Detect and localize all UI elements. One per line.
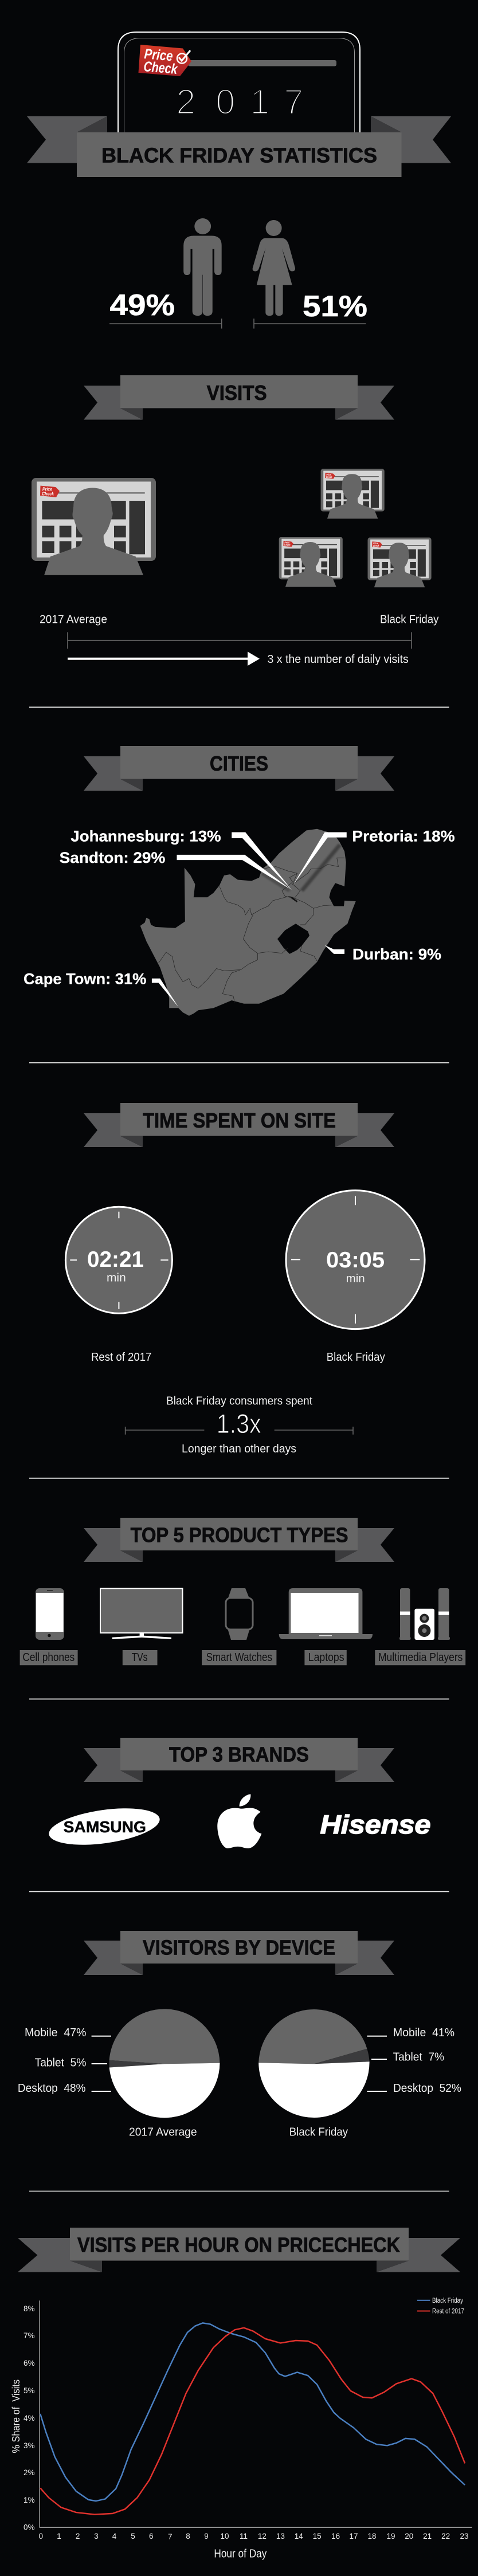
x axis labels [39, 2532, 469, 2541]
product: cell phones [20, 1588, 78, 1665]
callout: Johannesburg 13%: Johannesburg: 13% [70, 828, 221, 845]
legend: mobile 41%: Mobile 41% [393, 2027, 455, 2039]
visits comparison scale: Black Friday [380, 614, 438, 626]
map of South Africa [140, 829, 356, 1016]
product: smart watches: Smart Watches [206, 1651, 272, 1664]
clock: Black Friday: 03:05 [326, 1248, 385, 1273]
x axis labels: 21 [423, 2532, 432, 2540]
y axis labels: 4% [23, 2414, 34, 2422]
x axis labels: 5 [131, 2532, 135, 2540]
callout: Cape Town 31% [23, 970, 178, 1007]
axes [40, 2300, 472, 2527]
x axis title: Hour of Day [214, 2548, 267, 2561]
legend: tablet 7% [371, 2051, 444, 2064]
callout: Pretoria 18%: Pretoria: 18% [352, 828, 455, 845]
series: Rest of 2017 [40, 2328, 465, 2515]
icon: small monitor 2, Black Friday: Check [284, 544, 291, 547]
product: multimedia players: Multimedia Players [378, 1651, 463, 1664]
product: TVs [100, 1588, 182, 1665]
main title ribbon: BLACK FRIDAY STATISTICS [101, 143, 377, 167]
clock: rest of 2017: min [107, 1272, 126, 1285]
x axis labels: 16 [331, 2532, 340, 2540]
callout: Johannesburg 13% [70, 828, 292, 890]
product: laptops [279, 1588, 373, 1665]
pie chart: 2017 average [18, 2009, 220, 2139]
heading: time spent on site [84, 1103, 394, 1147]
x axis labels: 9 [204, 2532, 209, 2540]
x axis labels: 7 [168, 2532, 173, 2541]
y axis labels: 2% [23, 2468, 34, 2477]
icon: large monitor with visitor, 2017 average: Check [42, 490, 54, 496]
x axis labels: 20 [405, 2532, 413, 2540]
logo: Hisense: Hisense [320, 1810, 431, 1839]
legend: Rest of 2017 [432, 2308, 464, 2315]
tablet frame with logo and year [118, 32, 360, 132]
x axis labels: 22 [441, 2532, 450, 2540]
callout: Sandton 29%: Sandton: 29% [60, 849, 165, 866]
visits comparison scale: 2017 Average [40, 614, 107, 626]
heading: visits: VISITS [207, 381, 267, 405]
x axis labels: 10 [220, 2532, 229, 2540]
visits comparison scale [40, 614, 438, 666]
logo: PriceCheck tag: Price [143, 46, 174, 64]
logo: Apple [217, 1794, 261, 1848]
heading: visitors by device [84, 1931, 394, 1975]
logo: PriceCheck tag [139, 45, 191, 77]
product: smart watches [202, 1588, 276, 1665]
clock: rest of 2017: 02:21 [87, 1247, 144, 1272]
legend [417, 2298, 464, 2315]
product: laptops: Laptops [308, 1651, 344, 1664]
logo: PriceCheck tag: Check [143, 58, 179, 77]
product: cell phones: Cell phones [22, 1651, 75, 1664]
x axis labels: 3 [94, 2532, 99, 2540]
year 2017: 2017 [176, 83, 303, 122]
callout: 1.3x longer: Longer than other days [182, 1443, 296, 1455]
heading: visits [84, 375, 394, 419]
heading: visitors by device: VISITORS BY DEVICE [143, 1936, 335, 1960]
y axis labels: 6% [23, 2359, 34, 2367]
x axis labels: 8 [186, 2532, 190, 2540]
gender split [109, 218, 367, 329]
heading: top 5 product types: TOP 5 PRODUCT TYPES [131, 1523, 348, 1547]
arrow: 3x daily visits [68, 651, 409, 666]
clock: Black Friday: min [346, 1273, 365, 1285]
icon: small monitor 3, Black Friday: Price [373, 542, 378, 545]
icon: woman [253, 220, 295, 316]
icon: small monitor 1, Black Friday: Price [326, 473, 331, 476]
heading: time spent on site: TIME SPENT ON SITE [143, 1109, 336, 1132]
line chart: visits per hour [10, 2298, 472, 2561]
icon: man [183, 218, 222, 316]
y axis title: % Share of Visits [10, 2379, 22, 2453]
y axis labels: 3% [23, 2441, 34, 2450]
product: multimedia players [375, 1588, 465, 1665]
y axis labels: 8% [23, 2304, 34, 2313]
y axis labels [23, 2304, 34, 2532]
pie chart: Black Friday: Black Friday [289, 2126, 348, 2139]
clock: Black Friday: Black Friday [327, 1351, 385, 1364]
x axis labels: 17 [349, 2532, 358, 2540]
x axis labels: 14 [295, 2532, 303, 2540]
x axis labels: 12 [258, 2532, 267, 2540]
heading: visits per hour on pricecheck [18, 2228, 460, 2272]
clock: rest of 2017: Rest of 2017 [91, 1351, 151, 1364]
product: TVs: TVs [132, 1651, 147, 1664]
female share: 51% [303, 290, 367, 323]
legend: tablet 5%: Tablet 5% [35, 2057, 87, 2070]
legend: tablet 7%: Tablet 7% [393, 2051, 444, 2064]
heading: top 3 brands: TOP 3 BRANDS [169, 1743, 309, 1766]
y axis labels: 5% [23, 2386, 34, 2395]
legend: desktop 52%: Desktop 52% [393, 2082, 461, 2095]
legend: desktop 48%: Desktop 48% [18, 2082, 86, 2095]
legend: mobile 47%: Mobile 47% [25, 2027, 87, 2039]
x axis labels: 6 [149, 2532, 154, 2540]
heading: cities [84, 746, 394, 791]
male share [109, 289, 222, 329]
icon: small monitor 3, Black Friday: Check [373, 544, 379, 547]
icon: large monitor with visitor, 2017 average [32, 478, 156, 575]
icon: small monitor 2, Black Friday: Price [284, 541, 290, 544]
callout: 1.3x longer: Black Friday consumers spent [166, 1395, 312, 1407]
x axis labels: 13 [276, 2532, 285, 2540]
x axis labels: 11 [240, 2532, 248, 2540]
icon: small monitor 2, Black Friday [279, 537, 343, 587]
male share: 49% [110, 289, 175, 322]
pie chart: 2017 average: 2017 Average [129, 2126, 197, 2139]
y axis labels: 7% [23, 2331, 34, 2340]
x axis labels: 4 [112, 2532, 117, 2540]
clock: Black Friday [286, 1191, 425, 1364]
icon: small monitor 1, Black Friday [321, 469, 385, 519]
main title ribbon [27, 116, 451, 177]
callout: Durban 9%: Durban: 9% [352, 945, 441, 963]
female share [254, 290, 367, 329]
x axis labels: 23 [460, 2532, 469, 2540]
heading: top 3 brands [84, 1738, 394, 1782]
legend: Black Friday [432, 2298, 463, 2304]
logo: Samsung: SAMSUNG [64, 1818, 146, 1836]
y axis labels: 0% [23, 2523, 34, 2532]
heading: cities: CITIES [210, 752, 268, 775]
x axis labels: 0 [39, 2532, 43, 2540]
x axis labels: 19 [386, 2532, 395, 2540]
callout: Sandton 29% [60, 849, 291, 890]
icon: small monitor 1, Black Friday: Check [326, 476, 332, 478]
clock: rest of 2017 [65, 1207, 172, 1364]
x axis labels: 2 [76, 2532, 80, 2540]
x axis labels: 15 [313, 2532, 322, 2540]
callout: Cape Town 31%: Cape Town: 31% [23, 970, 146, 987]
callout: 1.3x longer [126, 1395, 353, 1455]
pie chart: Black Friday [258, 2009, 461, 2139]
logo: Samsung [46, 1803, 162, 1851]
icon: small monitor 3, Black Friday [368, 537, 432, 587]
icon: large monitor with visitor, 2017 average: Price [42, 486, 52, 492]
heading: top 5 product types [84, 1518, 394, 1562]
heading: visits per hour on pricecheck: VISITS PER HOUR ON PRICECHECK [77, 2233, 400, 2256]
callout: 1.3x longer: 1.3x [217, 1408, 261, 1439]
y axis labels: 1% [23, 2496, 34, 2504]
x axis labels: 1 [57, 2532, 61, 2540]
x axis labels: 18 [367, 2532, 377, 2540]
series: Black Friday [40, 2323, 465, 2501]
callout: Pretoria 18% [293, 828, 455, 885]
arrow: 3x daily visits: 3 x the number of daily visits [267, 653, 409, 666]
